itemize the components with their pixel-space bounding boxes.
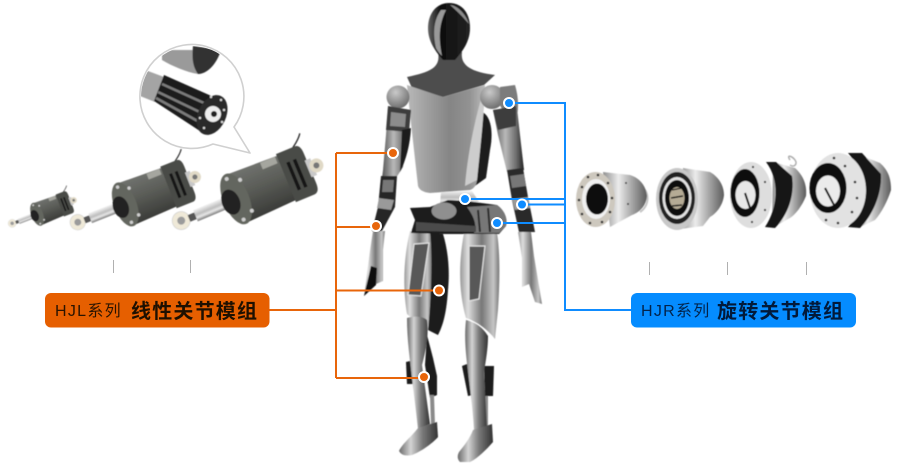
blue connector lines	[465, 103, 631, 310]
callout: actuator detail lens	[140, 44, 250, 153]
orange connector lines	[269, 153, 439, 378]
rotary actuator 1	[576, 172, 648, 227]
label: HJR series: 旋转关节模组	[717, 300, 844, 323]
tick marks: rotary series	[650, 262, 806, 275]
label: HJL series: 线性关节模组	[131, 300, 258, 323]
label: HJL series	[45, 293, 270, 328]
rotary actuator 3	[730, 156, 806, 228]
robot right shin and foot	[458, 320, 494, 462]
robot neck and yoke	[407, 52, 495, 97]
robot head	[428, 3, 470, 60]
linear actuator: medium	[60, 146, 209, 247]
tick marks: linear series	[114, 260, 190, 273]
robot chest highlight	[465, 85, 485, 186]
robot left shin and foot	[399, 317, 438, 456]
linear actuator: small	[3, 184, 81, 237]
label: HJR series	[631, 293, 856, 328]
blue joint markers	[460, 98, 527, 228]
robot left arm	[364, 86, 411, 296]
robot torso	[407, 85, 485, 193]
rotary actuator 4	[810, 153, 891, 228]
orange joint markers	[371, 148, 444, 382]
label: HJL series: HJL系列	[55, 302, 122, 320]
label: HJR series: HJR系列	[641, 302, 711, 320]
robot right thigh	[460, 233, 499, 339]
robot right arm	[480, 85, 542, 304]
linear actuator: large	[159, 130, 333, 250]
robot back panel	[472, 112, 492, 188]
robot figure	[364, 3, 542, 462]
rotary actuator 2	[656, 168, 724, 230]
robot pelvis	[410, 191, 507, 234]
robot left thigh	[404, 231, 449, 335]
